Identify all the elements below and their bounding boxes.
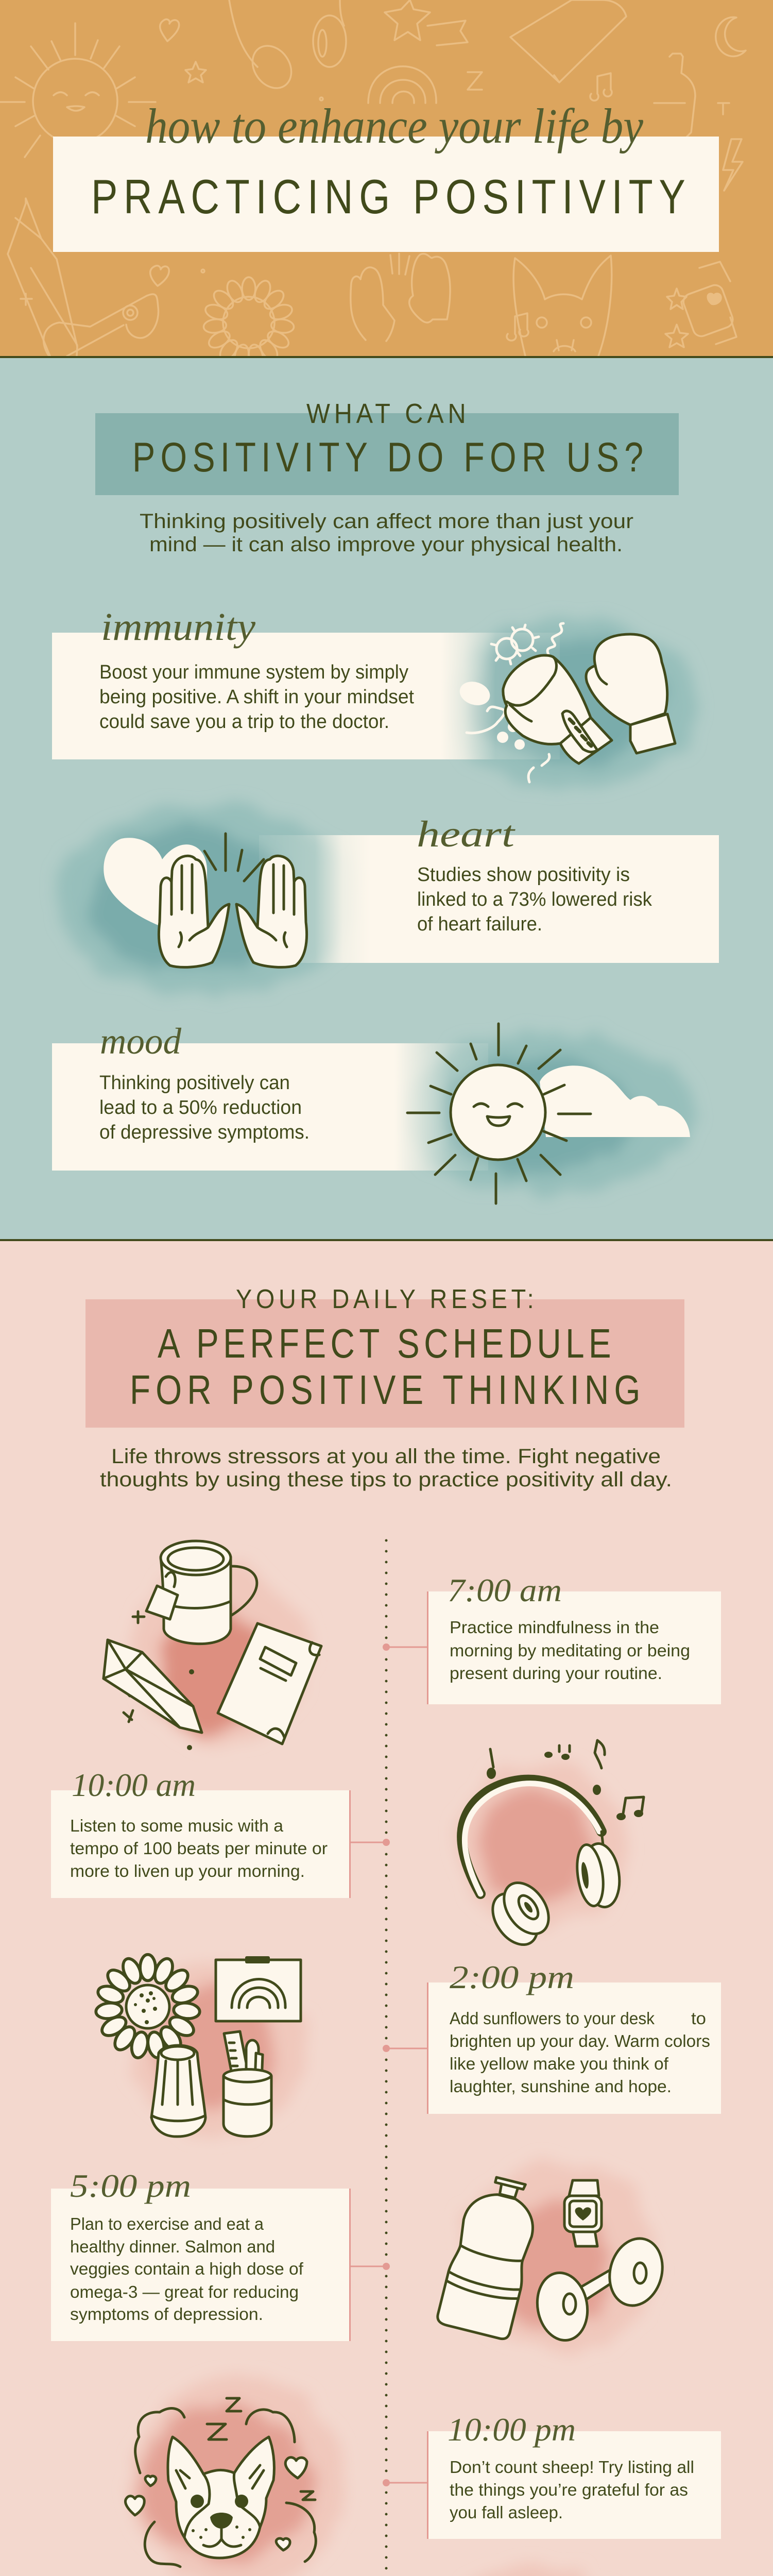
icon: sunflower	[95, 1955, 200, 2059]
body text: you fall asleep.	[450, 2503, 563, 2522]
script time: 10:00 am	[72, 1767, 196, 1803]
watercolor blob	[427, 2566, 639, 2576]
icon: headband	[462, 1780, 602, 1894]
watercolor blob	[131, 1965, 306, 2136]
script heading: how to enhance your life by	[145, 98, 643, 154]
icon: left hand	[159, 856, 229, 967]
body text: veggies contain a high dose of	[70, 2259, 304, 2278]
icon: rays	[204, 834, 264, 881]
icon: fitness watch	[564, 2180, 602, 2246]
body text	[70, 1816, 328, 1880]
body text	[450, 1618, 690, 1683]
dotted timeline	[385, 1540, 387, 2576]
body text: Practice mindfulness in the	[450, 1618, 659, 1637]
section heading box	[85, 1299, 684, 1428]
body text: laughter, sunshine and hope.	[450, 2077, 672, 2096]
script time: 2:00 pm	[450, 1959, 574, 1995]
body text: present during your routine.	[450, 1664, 662, 1683]
body text: more to liven up your morning.	[70, 1861, 305, 1880]
body text: tempo of 100 beats per minute or	[70, 1839, 328, 1858]
body text: linked to a 73% lowered risk	[417, 889, 652, 910]
watercolor blob	[458, 1762, 628, 1927]
watercolor blob	[134, 2375, 345, 2576]
icon: right boxing glove	[586, 634, 675, 753]
divider line	[0, 356, 773, 358]
body text: lead to a 50% reduction	[99, 1097, 302, 1118]
heading line two: A PERFECT SCHEDULE	[158, 1320, 611, 1366]
panel: daily reset	[0, 1241, 773, 2576]
panel: what can positivity do	[0, 358, 773, 1239]
icon: left boxing glove	[503, 655, 612, 764]
body text: Plan to exercise and eat a	[70, 2214, 264, 2233]
panel: header	[0, 0, 773, 391]
icon: music notes	[487, 1740, 644, 1820]
panel background	[52, 633, 560, 759]
icon: dumbbell	[532, 2232, 669, 2344]
icon: right ear cup	[574, 1832, 623, 1909]
icon: thought cloud	[135, 2409, 316, 2567]
heading line one: YOUR DAILY RESET:	[236, 1284, 534, 1314]
icon: crystal	[104, 1640, 202, 1733]
icon group: sleepy dog	[126, 2375, 345, 2576]
panel: 7:00 am	[383, 1572, 721, 1704]
body text	[417, 864, 652, 935]
header doodle pattern	[0, 0, 746, 391]
panel: 10:00 pm	[383, 2411, 721, 2539]
body text	[70, 2214, 304, 2324]
intro text	[140, 510, 633, 556]
panel: heart	[57, 804, 719, 994]
icon: right hand	[236, 856, 307, 967]
icon: picture frame	[216, 1956, 301, 2021]
watercolor blob	[402, 1033, 695, 1193]
panel background	[259, 835, 719, 963]
panel: 2:00 pm	[383, 1959, 721, 2114]
script label: heart	[417, 814, 516, 855]
divider line	[0, 1239, 773, 1241]
connector	[350, 2266, 386, 2267]
icon: notebook	[218, 1623, 321, 1744]
heading line one: WHAT CAN	[306, 398, 466, 429]
icon group: fitness	[436, 2161, 669, 2352]
body text: Studies show positivity is	[417, 864, 630, 886]
connector	[386, 1647, 427, 1648]
icon: germs	[467, 623, 563, 782]
icon: cloud	[540, 1065, 690, 1137]
body text: Don’t count sheep! Try listing all	[450, 2458, 694, 2477]
panel background	[52, 1043, 488, 1171]
body text	[450, 2458, 694, 2522]
icon: sleep letters and hearts	[126, 2398, 315, 2550]
heading line two: POSITIVITY DO FOR US?	[132, 434, 643, 480]
panel: 5:00 pm	[51, 2167, 390, 2341]
body text: could save you a trip to the doctor.	[99, 711, 389, 733]
intro text: Thinking positively can affect more than just your	[140, 510, 633, 533]
icon group: sunflower desk	[95, 1955, 306, 2137]
icon group: sleep mask	[427, 2566, 639, 2576]
script time: 7:00 am	[448, 1572, 562, 1608]
watercolor blob	[440, 618, 698, 788]
panel: immunity	[52, 605, 698, 788]
heading line three: FOR POSITIVE THINKING	[130, 1367, 640, 1413]
body text	[99, 1072, 310, 1143]
icon: mug	[146, 1541, 257, 1644]
panel: mood	[52, 1021, 695, 1204]
intro text: thoughts by using these tips to practice positivity all day.	[100, 1468, 672, 1491]
icon: vase	[151, 2045, 205, 2137]
body text: Boost your immune system by simply	[99, 662, 408, 683]
icon: heart	[104, 838, 207, 926]
script time: 10:00 pm	[448, 2411, 576, 2448]
body text: being positive. A shift in your mindset	[99, 686, 414, 708]
connector	[386, 2482, 427, 2483]
body text: like yellow make you think of	[450, 2054, 669, 2073]
body text	[99, 662, 414, 733]
icon: left ear cup	[484, 1874, 558, 1953]
body text: of depressive symptoms.	[99, 1122, 310, 1143]
connector	[386, 2047, 427, 2049]
title panel	[53, 137, 719, 252]
script label: immunity	[101, 605, 255, 649]
connector	[350, 1841, 386, 1843]
body text: omega-3 — great for reducing	[70, 2282, 299, 2301]
intro text: mind — it can also improve your physical health.	[149, 533, 623, 556]
script label: mood	[100, 1021, 182, 1062]
body text: the things you’re grateful for as	[450, 2480, 688, 2499]
icon: sun	[407, 1024, 591, 1204]
body text: healthy dinner. Salmon and	[70, 2237, 275, 2256]
body text: symptoms of depression.	[70, 2304, 263, 2324]
icon: dog face	[168, 2437, 274, 2558]
icon: pen cup	[224, 2031, 271, 2137]
script time: 5:00 pm	[70, 2167, 191, 2204]
main title: PRACTICING POSITIVITY	[91, 170, 685, 224]
body text: to	[691, 2009, 706, 2028]
intro text	[100, 1445, 672, 1491]
body text	[450, 2009, 710, 2096]
body text: Thinking positively can	[99, 1072, 290, 1094]
body text: morning by meditating or being	[450, 1641, 690, 1660]
body text: Listen to some music with a	[70, 1816, 284, 1835]
watercolor blob	[57, 804, 360, 994]
intro text: Life throws stressors at you all the time. Fight negative	[111, 1445, 661, 1468]
icon: water bottle	[436, 2172, 545, 2341]
icon group: tea, crystal, notebook	[104, 1541, 321, 1750]
panel: 10:00 am	[51, 1767, 390, 1898]
section heading box	[95, 413, 679, 495]
body text: brighten up your day. Warm colors	[450, 2031, 710, 2050]
body text: Add sunflowers to your desk	[450, 2009, 655, 2028]
icon group: headphones	[458, 1740, 644, 1953]
body text: of heart failure.	[417, 913, 542, 935]
watercolor blob	[461, 2161, 657, 2352]
watercolor blob	[134, 1561, 309, 1747]
